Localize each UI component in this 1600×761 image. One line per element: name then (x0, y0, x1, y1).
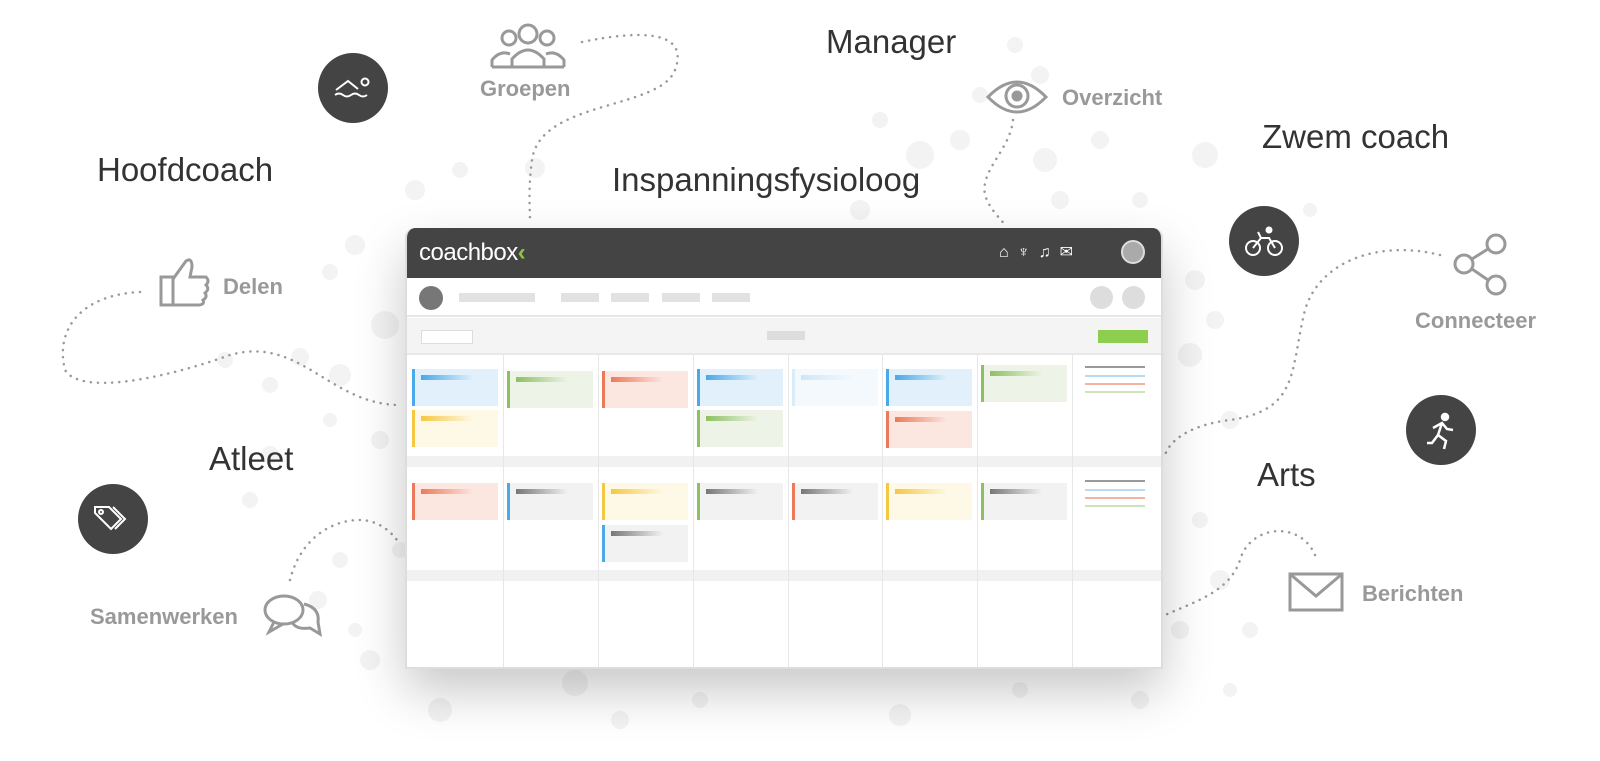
icon: connecteer (1415, 234, 1536, 333)
heading: Inspanningsfysioloog: Inspanningsfysioloog (612, 161, 920, 198)
icon: tags (78, 484, 148, 554)
heading: Hoofdcoach: Hoofdcoach (97, 151, 273, 188)
icon: groepen: Groepen (480, 76, 570, 101)
icon: connecteer: Connecteer (1415, 308, 1536, 333)
heading: Manager: Manager (826, 23, 956, 60)
app header (407, 228, 1165, 278)
icon: delen: Delen (223, 274, 283, 299)
icon: delen (160, 258, 283, 306)
icon: berichten (1288, 572, 1463, 612)
icon: overzicht: Overzicht (1062, 85, 1162, 110)
toolbar (407, 318, 1165, 355)
calendar cards (412, 365, 1145, 562)
calendar grid (407, 355, 1161, 667)
icon: samenwerken (90, 594, 322, 637)
icon: overzicht (986, 80, 1162, 114)
profile bar (407, 278, 1165, 317)
heading: Zwem coach: Zwem coach (1262, 118, 1449, 155)
app header: ⌂♆♫✉ (999, 244, 1082, 261)
icon: bike (1229, 206, 1299, 276)
icon: samenwerken: Samenwerken (90, 604, 238, 629)
heading: Arts: Arts (1257, 456, 1316, 493)
icon: runner (1406, 395, 1476, 465)
icon: berichten: Berichten (1362, 581, 1463, 606)
app header: coachbox‹ (419, 239, 525, 266)
heading: Atleet: Atleet (209, 440, 293, 477)
app window (405, 228, 1163, 669)
icon: groepen (480, 24, 570, 101)
icon: swim (318, 53, 388, 123)
